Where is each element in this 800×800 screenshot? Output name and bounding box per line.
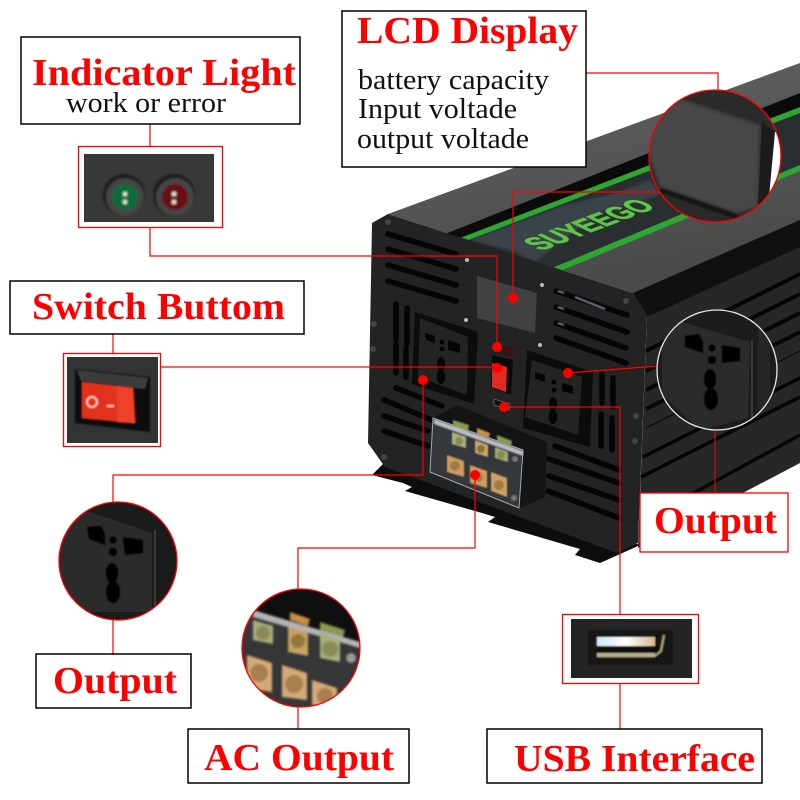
icon: USB port photo xyxy=(562,614,698,684)
panel: Output left: Output xyxy=(53,660,177,702)
USB port on panel xyxy=(494,399,510,410)
panel: Output right xyxy=(640,493,788,552)
inverter top face xyxy=(388,63,800,293)
text block: LCD details: battery capacity xyxy=(358,64,550,96)
inverter front panel xyxy=(368,214,647,553)
output zoom circle right xyxy=(655,308,780,433)
heading: Indicator Light: Indicator Light xyxy=(32,52,296,94)
wires behind vents xyxy=(558,291,605,325)
panel: Output right: Output xyxy=(654,500,777,542)
panel: Output left xyxy=(36,654,191,708)
panel: Switch Buttom xyxy=(10,281,304,334)
terminal block xyxy=(430,405,547,508)
left socket xyxy=(412,312,478,404)
right socket xyxy=(523,350,593,447)
panel: Indicator Light xyxy=(21,37,300,124)
rocker switch on panel xyxy=(491,355,513,395)
indicator lamp on panel xyxy=(503,346,513,356)
text block: LCD details: output voltade xyxy=(357,123,529,155)
inverter mounting bracket xyxy=(372,462,640,563)
LCD screen xyxy=(477,276,537,333)
icon: switch photo xyxy=(64,354,160,446)
vent slots xyxy=(384,234,627,518)
panel: AC Output xyxy=(188,729,409,783)
inverter right side xyxy=(633,220,800,548)
output zoom circle left xyxy=(58,500,178,622)
panel: USB Interface xyxy=(487,729,762,783)
text block: LCD details xyxy=(357,64,550,155)
callout dots xyxy=(418,293,573,480)
brand text: SUYEEGO xyxy=(515,195,664,254)
panel: LCD Display xyxy=(342,10,586,167)
panel: Switch Buttom: Switch Buttom xyxy=(32,286,285,328)
heading: LCD Display: LCD Display xyxy=(357,10,578,52)
inverter device xyxy=(368,63,800,563)
LCD zoom circle xyxy=(645,85,785,225)
panel: USB Interface: USB Interface xyxy=(514,738,755,780)
text block: LCD details: Input voltade xyxy=(358,93,517,125)
callout lines xyxy=(113,73,718,729)
icon: indicator lights photo xyxy=(78,146,222,228)
AC terminal zoom circle xyxy=(240,588,362,710)
text: work or error: work or error xyxy=(66,87,226,119)
panel screws xyxy=(370,219,639,460)
panel: AC Output: AC Output xyxy=(204,737,394,779)
